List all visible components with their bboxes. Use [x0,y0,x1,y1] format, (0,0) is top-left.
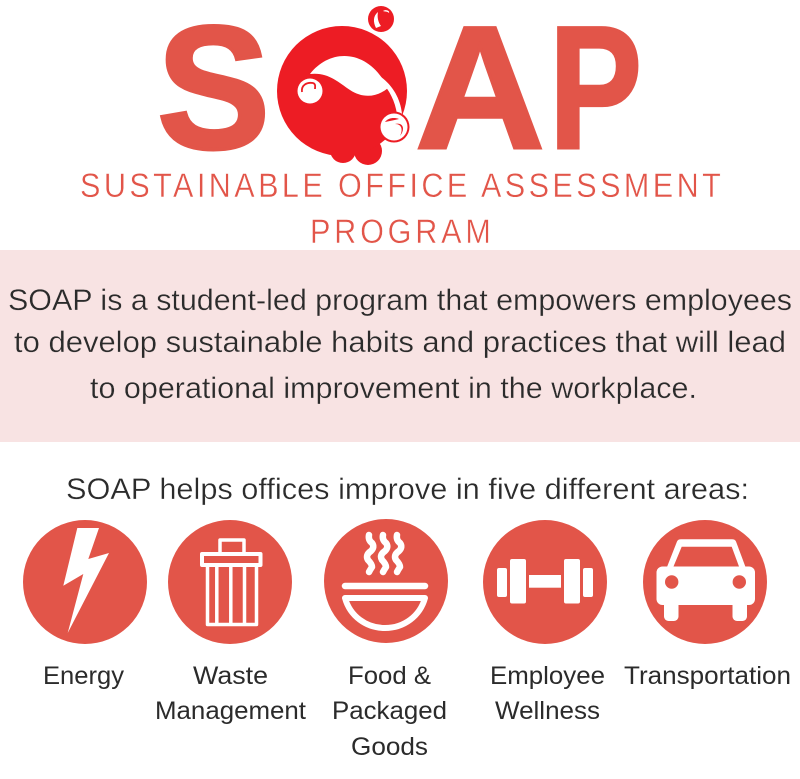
label: employee wellness [490,662,605,725]
text block: description: to operational improvement in the workplace. [90,372,697,405]
text block: description: to develop sustainable habits and practices that will lead [14,326,786,359]
logo: SOAP wordmark [157,0,642,186]
label: employee wellness: Wellness [495,697,600,725]
label: food and packaged goods: Goods [351,733,428,761]
heading: five areas: SOAP helps offices improve in five different areas: [66,473,749,506]
icon: soap bubble O with leaf [277,6,410,165]
label: food and packaged goods: Packaged [332,697,447,725]
icon: waste bin [168,520,292,644]
icon: food bowl [324,519,448,643]
letters A and P [415,0,642,186]
label: waste management [155,662,306,725]
icon: car [643,520,767,644]
label: transportation: Transportation [624,662,791,690]
text block: description: SOAP is a student-led program that empowers employees [8,284,792,317]
icon: dumbbell [483,520,607,644]
subtitle: PROGRAM [310,213,491,250]
label: waste management: Management [155,697,306,725]
label: food and packaged goods [332,662,447,761]
label: employee wellness: Employee [490,662,605,690]
icon: energy [23,520,147,644]
label: waste management: Waste [193,662,268,690]
label: food and packaged goods: Food & [348,662,431,690]
text block: description [8,284,792,405]
subtitle [80,167,721,250]
label: energy: Energy [43,662,125,690]
panel: program description [0,250,800,442]
labels: five areas [43,662,791,761]
subtitle: SUSTAINABLE OFFICE ASSESSMENT [80,167,721,204]
